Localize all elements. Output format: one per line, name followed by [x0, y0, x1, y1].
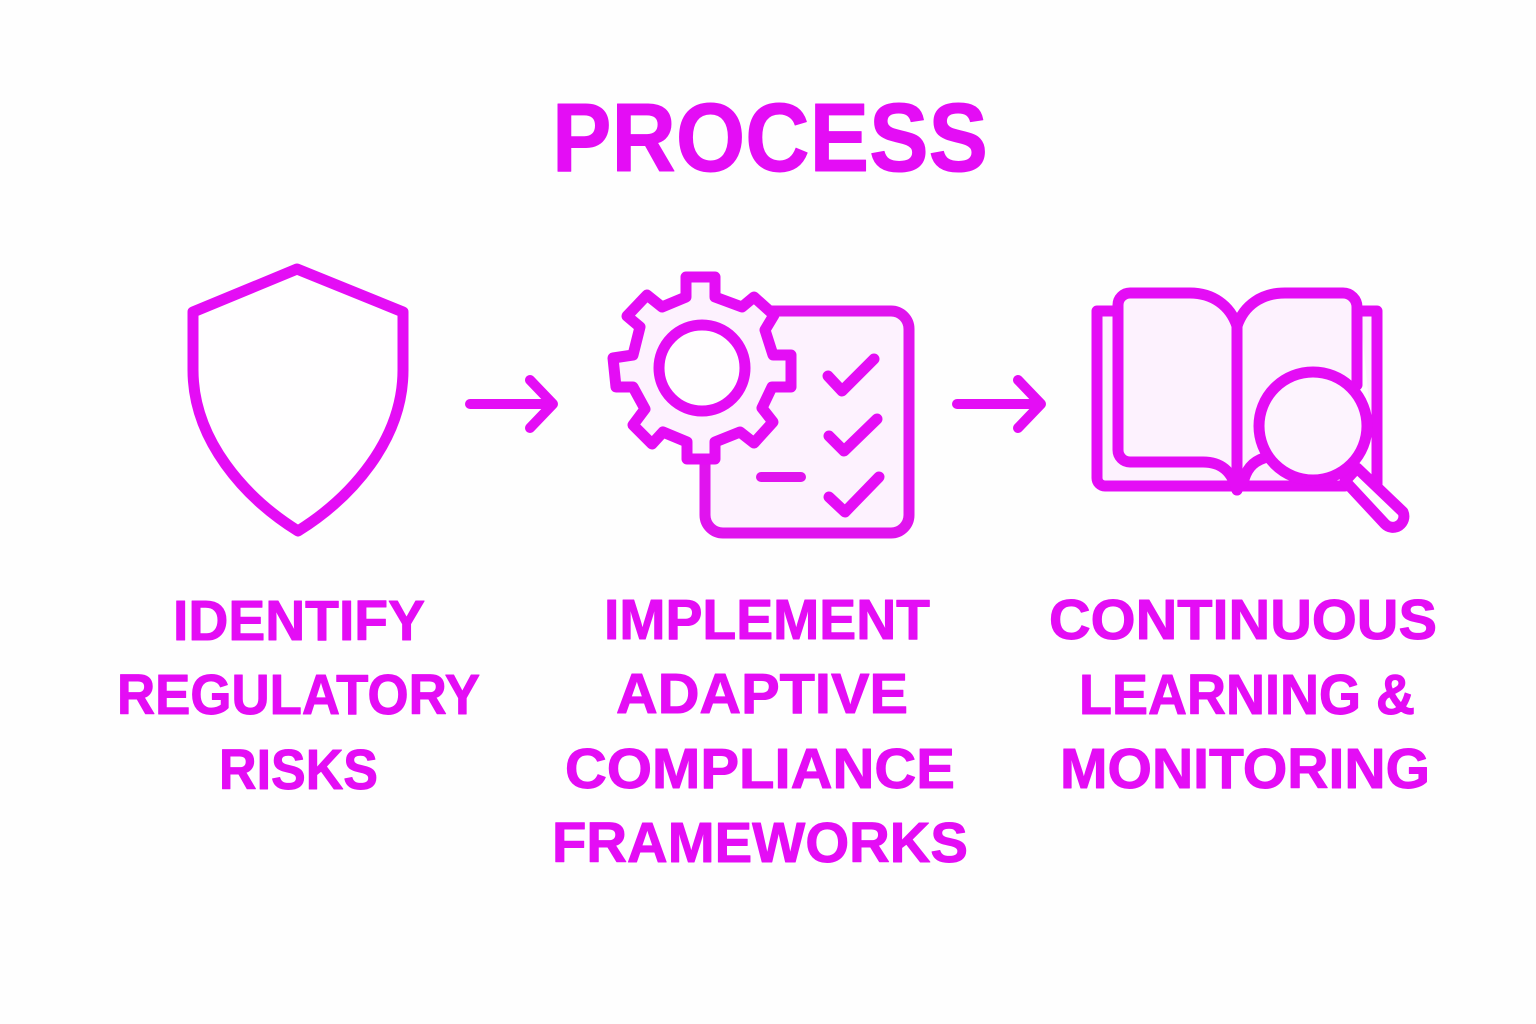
- arrow: identify to implement: [470, 380, 553, 428]
- label: implement adaptive compliance frameworks: [552, 588, 968, 875]
- check marks: [828, 359, 879, 512]
- label: implement adaptive compliance frameworks: COMPLIANCE: [565, 737, 955, 801]
- label: identify regulatory risks: REGULATORY: [117, 663, 480, 727]
- gear: [613, 277, 791, 459]
- label: continuous learning and monitoring: LEARNING &: [1079, 663, 1415, 727]
- gear hub: [659, 325, 745, 411]
- icon: open book with magnifier: [1097, 293, 1404, 527]
- icon: gear and checklist: [613, 277, 909, 533]
- label: continuous learning and monitoring: CONTINUOUS: [1049, 588, 1437, 652]
- checklist outline: [705, 311, 909, 533]
- label: implement adaptive compliance frameworks: ADAPTIVE: [616, 662, 908, 726]
- left page: [1118, 293, 1237, 490]
- back cover: [1097, 311, 1377, 486]
- icon: shield: [193, 269, 403, 531]
- magnifier handle: [1345, 468, 1404, 527]
- label: identify regulatory risks: RISKS: [219, 738, 378, 802]
- label: continuous learning and monitoring: [1049, 588, 1437, 801]
- label: identify regulatory risks: IDENTIFY: [173, 589, 425, 653]
- checklist panel: [705, 311, 909, 533]
- label: implement adaptive compliance frameworks: FRAMEWORKS: [552, 811, 968, 875]
- dash: [761, 472, 801, 482]
- magnifier lens: [1259, 372, 1367, 480]
- label: identify regulatory risks: [117, 589, 480, 802]
- label: implement adaptive compliance frameworks: IMPLEMENT: [604, 588, 930, 652]
- label: continuous learning and monitoring: MONITORING: [1060, 737, 1430, 801]
- right page: [1237, 293, 1357, 480]
- arrow: implement to learning: [957, 380, 1041, 428]
- title: PROCESS: [552, 83, 988, 192]
- right page outline and spine: [1237, 293, 1357, 490]
